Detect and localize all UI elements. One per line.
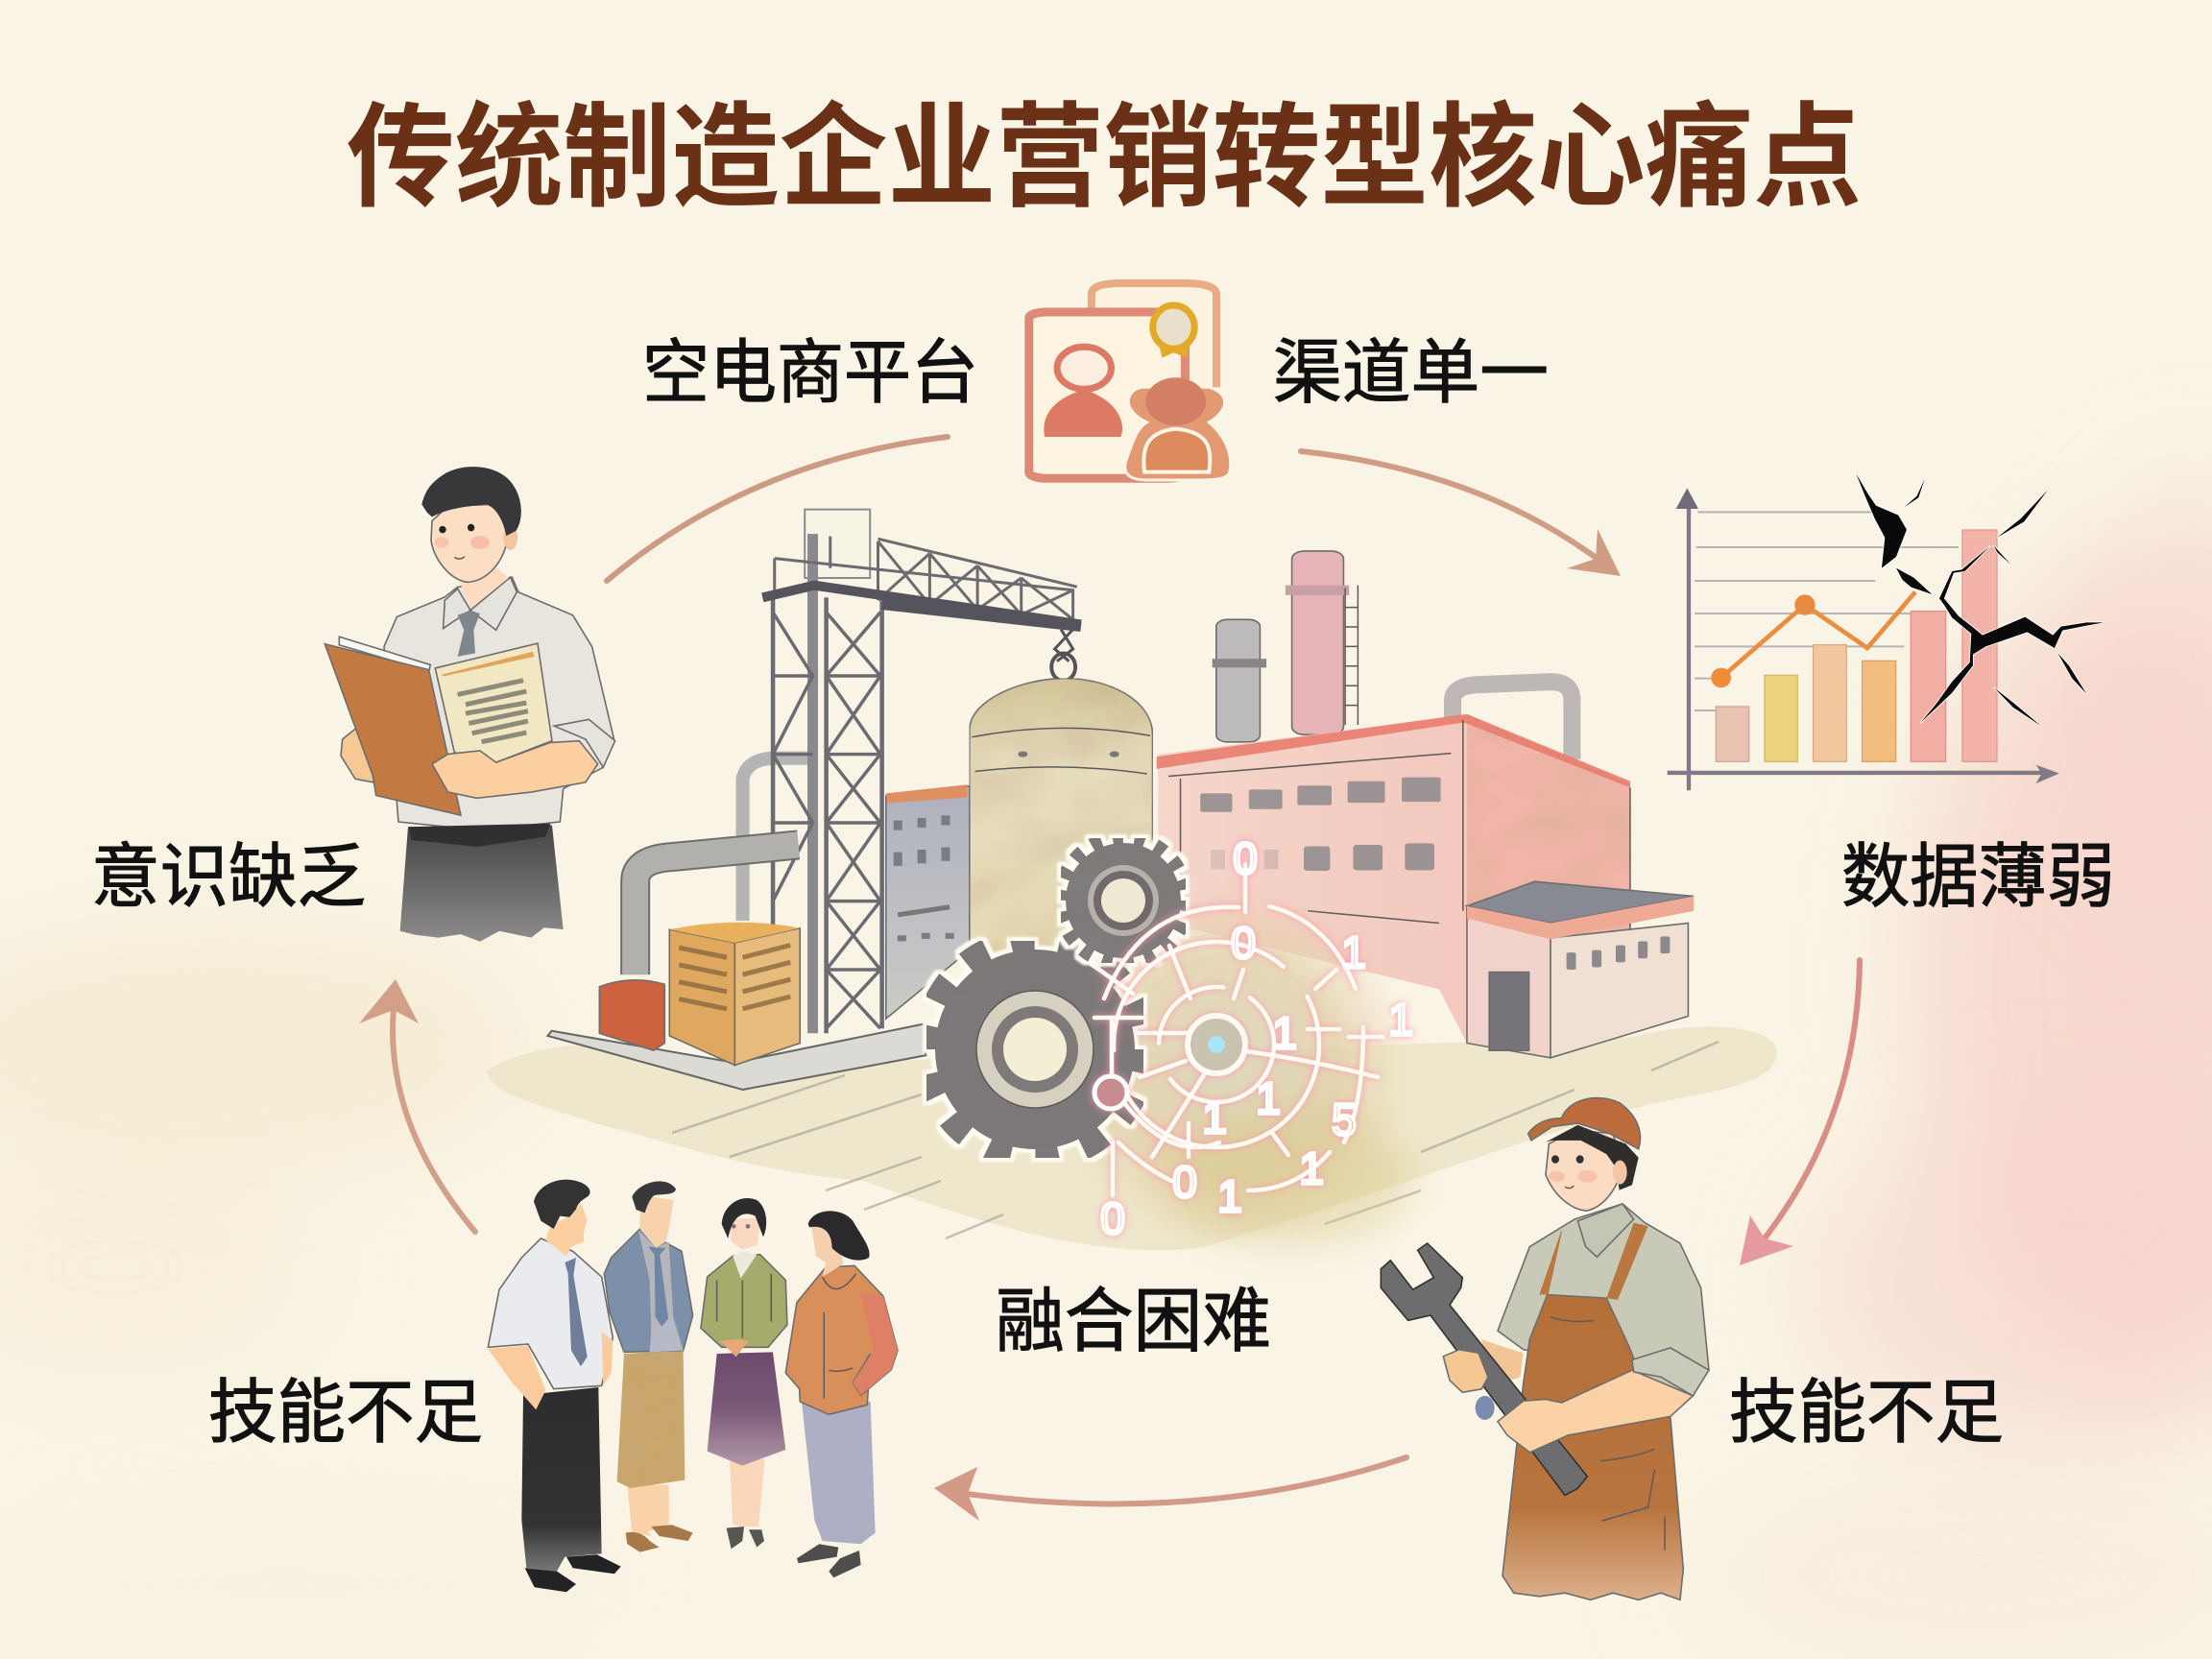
label: insufficient skills left: 技能不足	[208, 1374, 483, 1452]
digits: 0	[1231, 918, 1256, 968]
shirt	[384, 577, 614, 830]
digits: 0	[1233, 833, 1258, 883]
cap	[1528, 1098, 1640, 1149]
chimneys	[1213, 551, 1358, 742]
cuff	[554, 719, 615, 767]
label: single channel: 渠道单一	[1273, 334, 1549, 412]
chart: cracked bar and line chart	[1668, 473, 2104, 790]
hands	[1443, 1350, 1488, 1392]
trend line	[1721, 592, 1915, 678]
gantry	[775, 537, 1077, 619]
digits: 1	[1256, 1073, 1281, 1123]
label: weak data: 数据薄弱	[1841, 838, 2115, 916]
arrow: right arc	[1740, 960, 1860, 1265]
digits: 1	[1217, 1171, 1242, 1221]
tie	[458, 611, 480, 657]
book	[339, 637, 430, 671]
character group: four colleagues	[488, 1180, 898, 1592]
grey building	[886, 784, 970, 1019]
storage tank	[970, 679, 1153, 974]
cuff	[1632, 1348, 1709, 1396]
forearm and hand	[432, 741, 598, 798]
arrow: left arc	[359, 979, 475, 1232]
tower	[762, 510, 1081, 1033]
label: insufficient skills right: 技能不足	[1729, 1374, 2004, 1452]
forearm left	[1481, 1339, 1524, 1383]
left hand	[341, 728, 387, 782]
digital circuit wheel	[1094, 833, 1413, 1243]
grid lines	[1695, 512, 1959, 710]
arrow: top right arc	[1301, 451, 1621, 576]
label: lack of awareness: 意识缺乏	[91, 838, 366, 916]
icon: large gear	[926, 941, 1143, 1158]
woman in green cardigan	[701, 1198, 787, 1549]
digits: 5	[1332, 1094, 1357, 1144]
digits: 1	[1388, 995, 1413, 1045]
icon: platform profile cards	[1029, 283, 1231, 480]
digits: 1	[1341, 927, 1366, 977]
label: integration difficulty: 融合困难	[996, 1283, 1271, 1360]
label: e-commerce platform: 空电商平台	[642, 334, 978, 412]
main building	[1157, 714, 1630, 1055]
cracks	[1856, 473, 2104, 727]
man in white shirt	[488, 1180, 621, 1592]
title: 传统制造企业营销转型核心痛点	[347, 95, 1862, 222]
arrow: top left arc	[607, 437, 948, 581]
belt	[409, 824, 550, 847]
face	[1546, 1130, 1623, 1211]
digits: 1	[1272, 1008, 1297, 1058]
ground wash	[487, 1026, 1777, 1250]
big pipe	[636, 845, 799, 974]
digits: 0	[1172, 1157, 1197, 1207]
factory illustration	[487, 510, 1777, 1250]
digital glow background	[1046, 883, 1411, 1248]
character: worker with wrench	[1381, 1098, 1709, 1599]
base platform	[547, 1023, 926, 1090]
bars	[1716, 530, 1997, 761]
shirt	[1498, 1204, 1709, 1394]
arrow: bottom arc	[934, 1457, 1407, 1521]
neck and face	[459, 567, 509, 609]
woman in orange jacket	[785, 1211, 898, 1577]
character: manager reading book	[325, 467, 615, 942]
apron	[1503, 1223, 1683, 1599]
roof pipe	[1453, 682, 1572, 759]
icon: small gear	[1061, 838, 1186, 963]
digits: 1	[1202, 1093, 1227, 1142]
hair	[421, 467, 521, 536]
annex building	[1467, 881, 1694, 1058]
orange crate	[669, 923, 800, 1065]
digits: 1	[1299, 1143, 1324, 1193]
man in blue jacket	[604, 1181, 693, 1552]
wrench	[1381, 1243, 1587, 1495]
red barrel	[599, 980, 664, 1050]
hook	[1051, 630, 1075, 681]
digits	[1100, 833, 1413, 1243]
road lines	[672, 1042, 1719, 1238]
trousers	[400, 826, 564, 942]
digits: 0	[1100, 1193, 1125, 1243]
windows	[1200, 778, 1441, 871]
axes	[1668, 502, 2048, 790]
thin pipe behind tower	[743, 758, 814, 921]
